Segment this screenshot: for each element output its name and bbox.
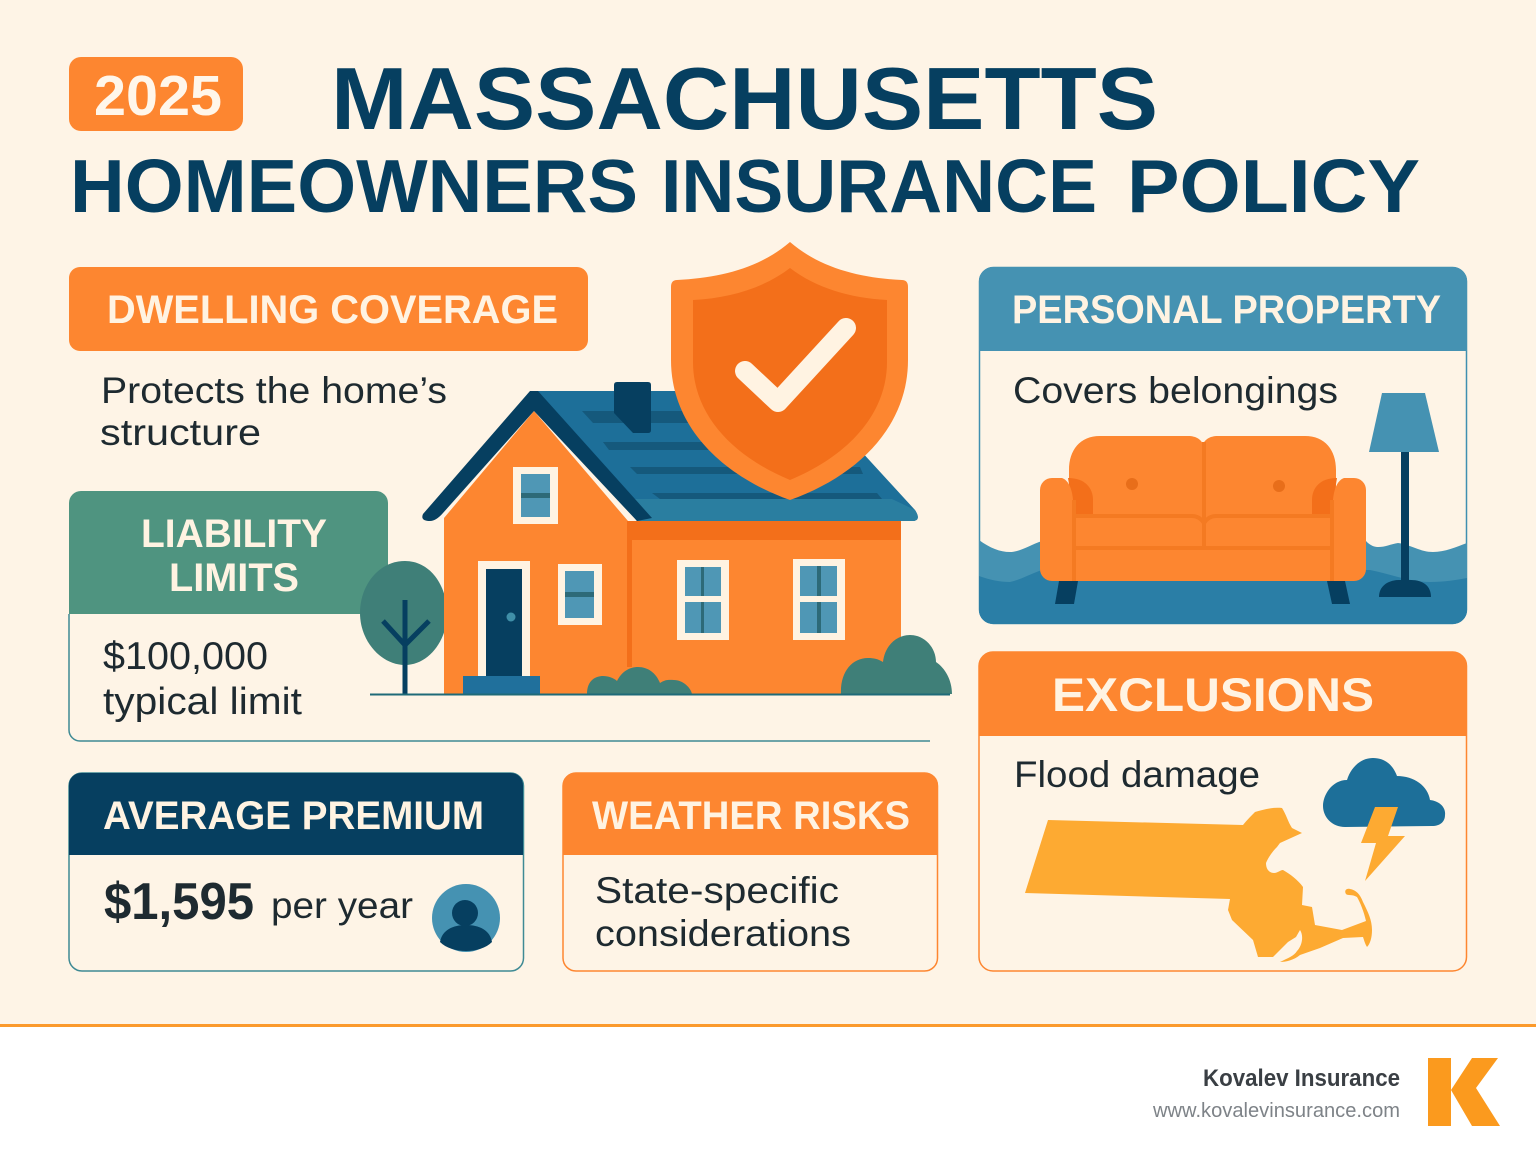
panel: liability limits: LIMITS [169, 556, 299, 600]
panel: liability limits: $100,000 [103, 635, 268, 678]
icon: shield with check [671, 242, 908, 500]
panel: personal property: Covers belongings [1013, 370, 1338, 411]
panel: liability limits: typical limit [103, 681, 302, 723]
panel: average premium [69, 773, 524, 971]
panel: liability limits [69, 491, 930, 741]
panel: liability limits: LIABILITY [141, 512, 327, 556]
panel: weather risks: WEATHER RISKS [592, 794, 910, 838]
panel: weather risks [563, 773, 938, 971]
year badge [69, 57, 243, 131]
icon: sofa [1040, 436, 1366, 604]
bushes [587, 635, 952, 694]
illustration: water [979, 540, 1467, 624]
panel: personal property [979, 267, 1467, 624]
logo [1428, 1058, 1500, 1126]
windows [677, 559, 845, 640]
illustration: house [370, 382, 952, 694]
small window [558, 564, 602, 625]
door [463, 561, 540, 694]
panel: dwelling coverage [69, 267, 588, 453]
panel: exclusions: Flood damage [1014, 754, 1260, 795]
panel: personal property: PERSONAL PROPERTY [1012, 288, 1441, 332]
panel: weather risks: State-specific [595, 870, 839, 911]
panel: dwelling coverage: structure [100, 412, 261, 453]
title: HOMEOWNERS [70, 144, 638, 228]
panel: average premium: AVERAGE PREMIUM [103, 794, 484, 838]
map: Massachusetts [1025, 808, 1372, 962]
year badge: 2025 [94, 64, 222, 128]
panel: exclusions [979, 652, 1467, 971]
panel: exclusions: EXCLUSIONS [1052, 668, 1374, 721]
illustration: tree [360, 561, 447, 695]
title: POLICY [1127, 144, 1420, 228]
icon: storm cloud [1323, 758, 1445, 881]
title [70, 49, 1420, 228]
icon: lamp [1369, 393, 1439, 597]
panel: average premium: per year [271, 885, 413, 926]
footer: www.kovalevinsurance.com [1152, 1100, 1400, 1122]
panel: dwelling coverage: Protects the home’s [101, 370, 447, 411]
footer [0, 1024, 1536, 1154]
footer: Kovalev Insurance [1203, 1065, 1400, 1092]
title: INSURANCE [661, 144, 1097, 228]
panel: weather risks: considerations [595, 913, 851, 954]
panel: dwelling coverage: DWELLING COVERAGE [107, 288, 558, 332]
icon: person [432, 884, 500, 952]
title: MASSACHUSETTS [331, 49, 1158, 148]
attic window [513, 467, 558, 524]
panel: average premium: $1,595 [104, 873, 254, 931]
